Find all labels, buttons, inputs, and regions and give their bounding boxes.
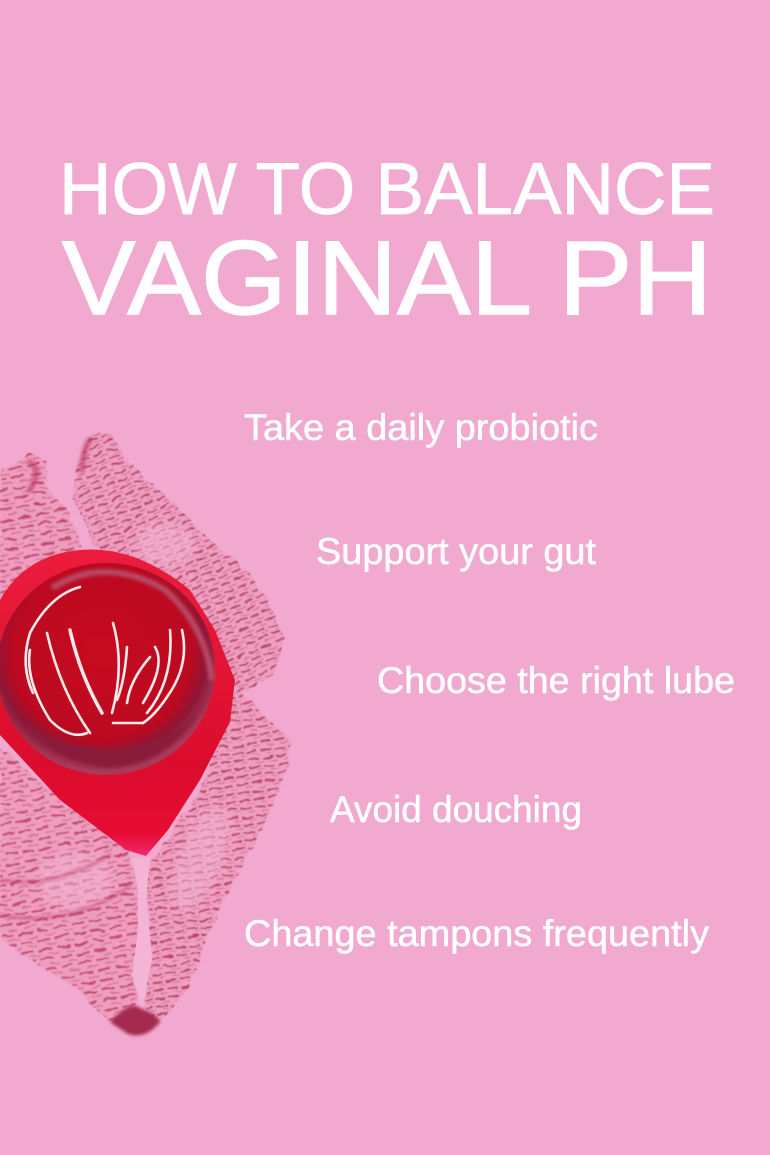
jelly highlights xyxy=(26,587,184,735)
illustration: lip print and red jelly xyxy=(0,432,292,1035)
lip print upper left xyxy=(0,453,82,600)
tip 2: Support your gut xyxy=(316,531,597,572)
lip print lower left xyxy=(0,745,140,1030)
tip 5: Change tampons frequently xyxy=(244,913,710,954)
jelly disc xyxy=(0,563,215,775)
lip print lower right xyxy=(145,690,292,1022)
jelly lower rim xyxy=(6,695,208,768)
lip print upper right xyxy=(73,432,283,695)
title xyxy=(59,149,715,337)
tip 3: Choose the right lube xyxy=(377,660,735,701)
title line 1: HOW TO BALANCE xyxy=(59,149,715,230)
lip print pale inner areas xyxy=(37,523,241,919)
tip 4: Avoid douching xyxy=(330,789,582,830)
pale center streak xyxy=(132,858,152,1008)
lip print darker creases xyxy=(0,440,130,918)
list of tips xyxy=(244,407,735,954)
title line 2: VAGINAL PH xyxy=(62,220,712,337)
red pool xyxy=(0,550,235,856)
lip print dark tip at bottom xyxy=(110,1006,160,1036)
tip 1: Take a daily probiotic xyxy=(244,407,598,448)
jelly upper rim highlight xyxy=(52,572,212,680)
